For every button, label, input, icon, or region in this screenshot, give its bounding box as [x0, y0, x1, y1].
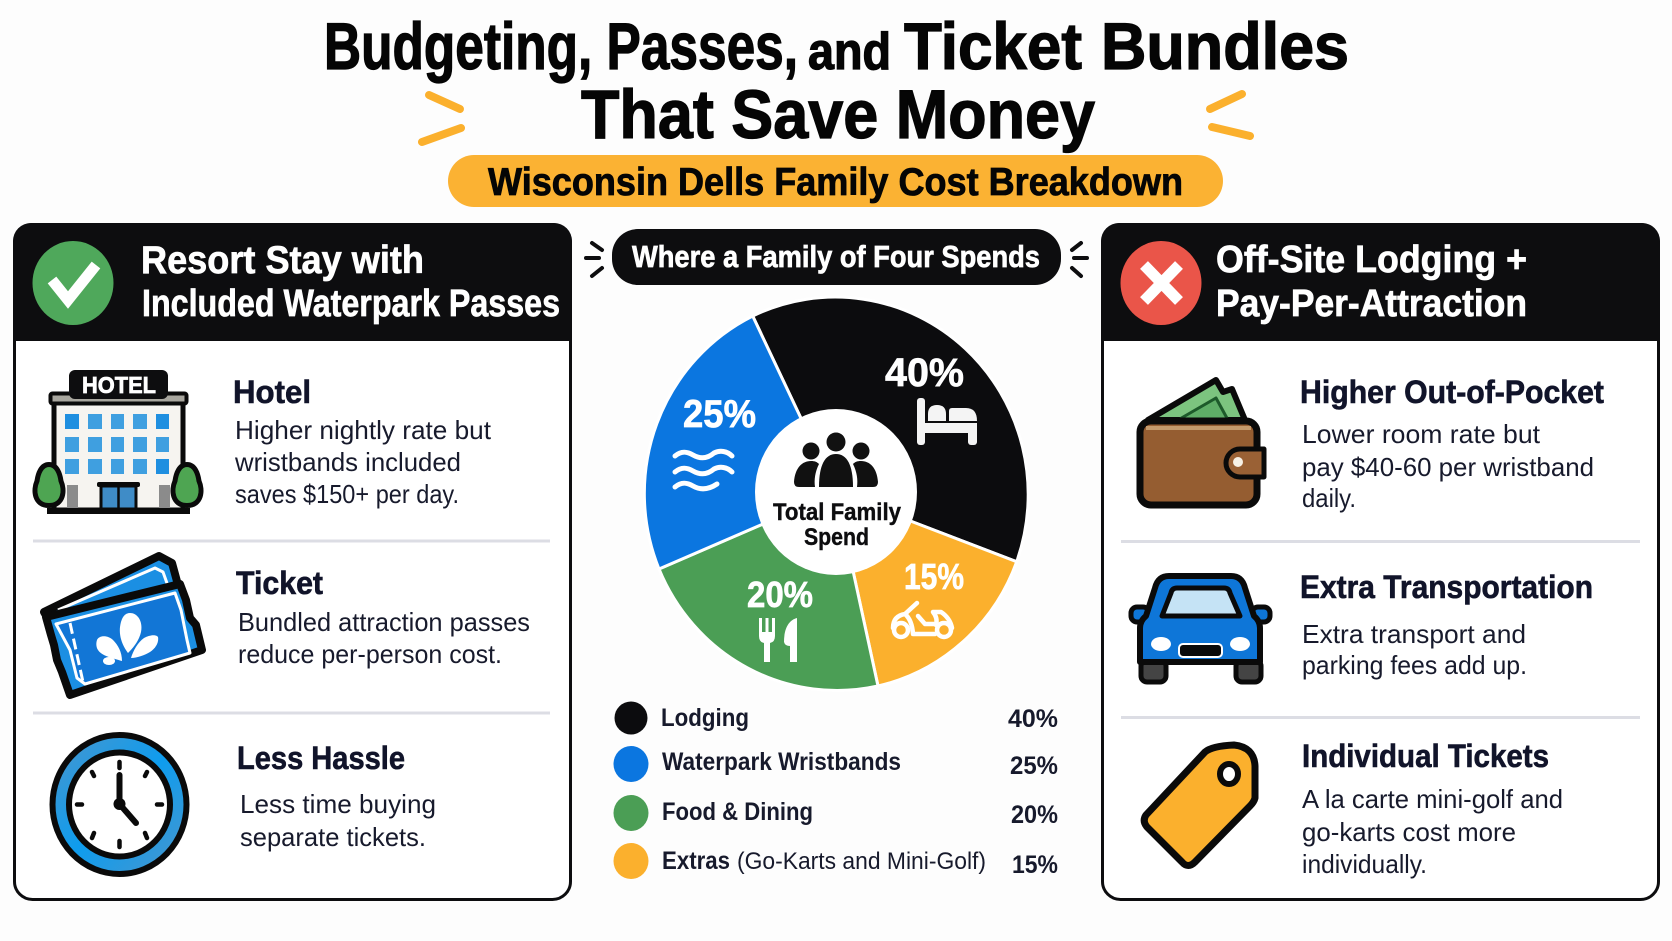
- text block: individual tickets: [1302, 738, 1563, 879]
- label: 25%: 25%: [683, 393, 756, 436]
- text block: hotel: Hotel: [233, 374, 311, 410]
- text block: less hassle: Less time buying: [240, 789, 436, 819]
- icon: go-kart: [893, 603, 952, 637]
- text block: less hassle: separate tickets.: [240, 822, 426, 852]
- text block: higher out-of-pocket: [1300, 374, 1604, 513]
- text block: individual tickets: individually.: [1302, 849, 1427, 879]
- legend row: lodging: 40%: [1008, 705, 1058, 733]
- right tree: [173, 464, 201, 506]
- decorative pill sparks: [586, 243, 1087, 276]
- left tree: [35, 464, 63, 506]
- legend row: waterpark wristbands: Waterpark Wristbands: [662, 748, 901, 776]
- text block: ticket: Bundled attraction passes: [238, 607, 530, 637]
- text block: individual tickets: Individual Tickets: [1302, 738, 1549, 774]
- text block: individual tickets: go-karts cost more: [1302, 817, 1516, 847]
- text block: hotel: Higher nightly rate but: [235, 415, 492, 445]
- decorative left sparks: [422, 95, 461, 142]
- icon: family: [794, 432, 878, 487]
- icon: hotel: [35, 370, 201, 514]
- icon: price tag: [1144, 745, 1255, 866]
- subtitle banner: Wisconsin Dells Family Cost Breakdown: [488, 161, 1183, 204]
- legend row: lodging: [614, 702, 1058, 734]
- panel header: off-site: [1101, 223, 1660, 341]
- title: Budgeting, Passes,: [324, 9, 798, 83]
- text block: hotel: wristbands included: [234, 447, 461, 477]
- icon: hotel: HOTEL: [82, 372, 156, 398]
- panel: off-site lodging: [1101, 223, 1660, 900]
- text block: higher out-of-pocket: pay $40-60 per wristband: [1302, 452, 1594, 482]
- text block: individual tickets: A la carte mini-golf and: [1302, 784, 1563, 814]
- text block: ticket: Ticket: [236, 565, 323, 601]
- title: [324, 9, 1349, 153]
- text block: ticket: [236, 565, 530, 669]
- icon: clock: [52, 735, 186, 874]
- legend row: lodging: Lodging: [661, 704, 749, 732]
- icon: green check: [32, 241, 114, 325]
- panel: resort stay: [13, 223, 572, 900]
- panel header: resort stay: [13, 223, 572, 341]
- text block: extra transportation: Extra transport and: [1302, 619, 1526, 649]
- legend row: extras: Extras: [662, 847, 730, 875]
- icon: fork and knife: [759, 618, 797, 662]
- icon: waves: [675, 451, 732, 489]
- legend row: waterpark wristbands: 25%: [1010, 752, 1058, 780]
- legend row: food and dining: [614, 795, 1058, 831]
- text block: hotel: saves $150+ per day.: [235, 479, 459, 509]
- legend row: extras: [614, 843, 1058, 879]
- center hub: Spend: [804, 524, 869, 551]
- center hub: [755, 409, 917, 575]
- pie chart: [644, 297, 1028, 690]
- icon: red x: [1120, 241, 1202, 325]
- text block: extra transportation: Extra Transportation: [1300, 569, 1593, 605]
- legend row: food and dining: Food & Dining: [662, 798, 813, 826]
- text block: less hassle: [237, 740, 436, 852]
- legend row: waterpark wristbands: [614, 746, 1058, 782]
- slice: extras 15%: [836, 492, 1017, 686]
- slice: food 20%: [659, 492, 878, 690]
- decorative right sparks: [1210, 94, 1250, 136]
- label: 20%: 20%: [747, 574, 813, 615]
- text block: extra transportation: parking fees add up.: [1302, 650, 1527, 680]
- center heading pill: [612, 229, 1061, 285]
- panel header: resort stay: Resort Stay with: [141, 239, 424, 282]
- title: Ticket: [904, 9, 1082, 83]
- label: 15%: 15%: [904, 556, 964, 597]
- label: 40%: 40%: [885, 351, 964, 395]
- panel header: resort stay: Included Waterpark Passes: [142, 283, 560, 325]
- legend row: extras: (Go-Karts and Mini-Golf): [737, 848, 986, 875]
- legend row: extras: 15%: [1012, 851, 1058, 879]
- text block: extra transportation: [1300, 569, 1593, 680]
- center heading pill: Where a Family of Four Spends: [632, 239, 1040, 274]
- icon: bed: [917, 398, 977, 445]
- text block: less hassle: Less Hassle: [237, 740, 405, 776]
- title: and: [808, 23, 891, 81]
- flower mark: [96, 613, 158, 665]
- text block: ticket: reduce per-person cost.: [238, 639, 502, 669]
- title: Bundles: [1101, 9, 1349, 83]
- center hub: Total Family: [773, 499, 902, 526]
- text block: higher out-of-pocket: Lower room rate but: [1302, 419, 1541, 449]
- icon: car: [1131, 576, 1270, 682]
- icon: tickets: [44, 556, 202, 695]
- slice: lodging 40%: [753, 297, 1028, 562]
- panel header: off-site: Off-Site Lodging +: [1216, 239, 1527, 281]
- slice: waterpark 25%: [644, 316, 836, 569]
- icon: wallet: [1140, 380, 1264, 505]
- text block: higher out-of-pocket: daily.: [1302, 483, 1356, 513]
- legend: [614, 702, 1058, 879]
- legend row: food and dining: 20%: [1011, 801, 1058, 829]
- title: That Save Money: [581, 76, 1095, 153]
- text block: hotel: [233, 374, 492, 509]
- text block: higher out-of-pocket: Higher Out-of-Pocket: [1300, 374, 1604, 410]
- panel header: off-site: Pay-Per-Attraction: [1216, 283, 1527, 325]
